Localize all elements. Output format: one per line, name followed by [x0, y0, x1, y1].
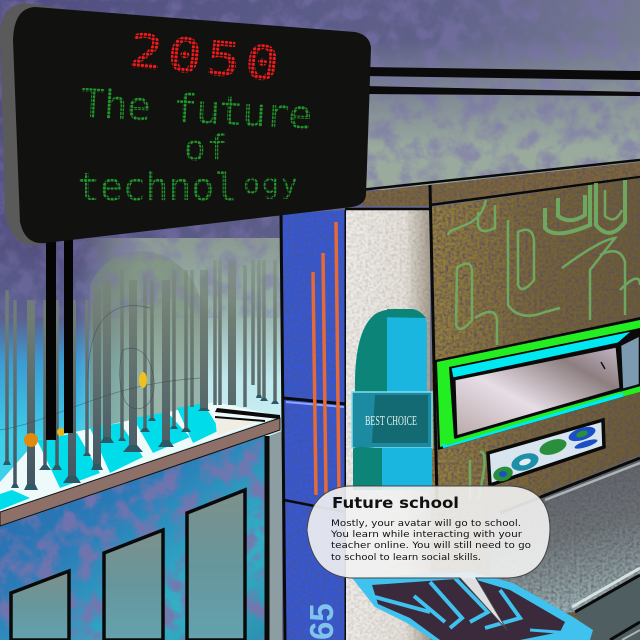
led title: the future: The future — [79, 81, 314, 139]
bubble body text: teacher online. You will still need to go — [331, 541, 531, 551]
green framed window — [435, 317, 640, 450]
surfboard shape — [352, 572, 593, 640]
yellow lights — [24, 372, 147, 447]
bubble body text: to school to learn social skills. — [331, 553, 481, 563]
led title: year: 2050 — [127, 24, 281, 91]
grey lower wall — [490, 455, 640, 640]
horizontal rods — [365, 67, 640, 96]
led title: technology: technol — [77, 165, 237, 209]
floral panel — [488, 420, 604, 485]
car: best choice — [352, 309, 432, 490]
blue column with orange lines — [280, 210, 346, 640]
forest of columns — [0, 260, 279, 490]
vertical wall line — [430, 185, 437, 500]
cyan floor — [0, 402, 280, 512]
white column — [346, 209, 430, 640]
bubble body text: You learn while interacting with your — [330, 530, 523, 540]
led title: technology: ogy — [243, 167, 300, 200]
vertical number: 65 — [303, 603, 340, 640]
railing — [215, 408, 280, 436]
led sign — [0, 3, 371, 245]
support poles — [46, 235, 73, 440]
brown ledge — [0, 418, 280, 526]
speech bubble — [307, 486, 550, 630]
bubble heading: Future school — [332, 494, 459, 512]
led title: of: of — [184, 128, 228, 169]
car: best choice: BEST CHOICE — [365, 414, 417, 429]
patterned wall — [432, 178, 640, 640]
tan upper band — [345, 160, 640, 209]
bubble body text — [330, 519, 531, 563]
bubble body text: Mostly, your avatar will go to school. — [331, 519, 521, 529]
hall backdrop — [0, 238, 282, 498]
lower blue wall with windows — [0, 431, 282, 640]
